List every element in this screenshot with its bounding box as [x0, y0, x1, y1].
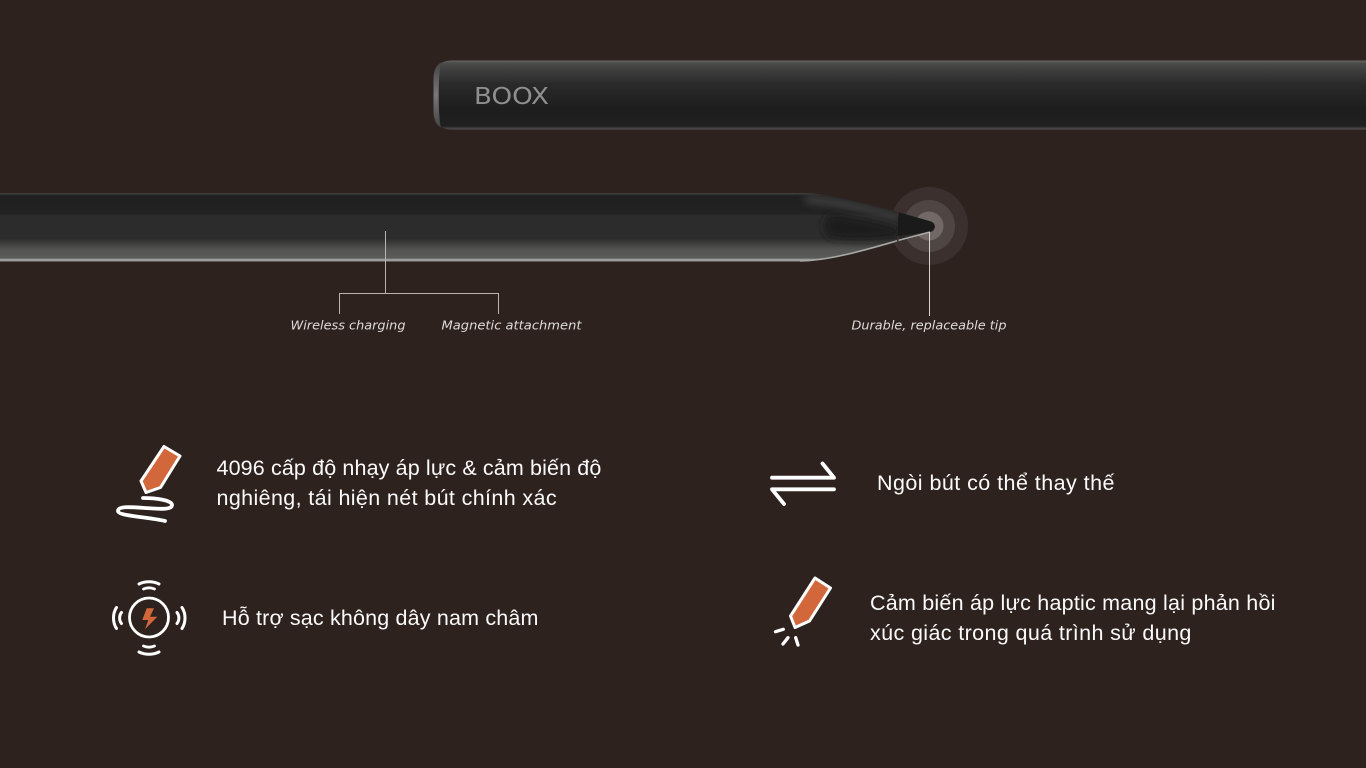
- pen: side view with tip: [0, 193, 935, 262]
- icon: haptic pen: [776, 578, 830, 645]
- text: haptic feedback: [870, 591, 1276, 645]
- text: pressure sensitivity: 4096 cấp độ nhạy áp lực & cảm biến độ: [216, 456, 601, 480]
- callout line: tip: [928, 232, 930, 316]
- label: magnetic attachment: Magnetic attachment: [442, 318, 583, 332]
- icon: pen writing: [118, 446, 180, 521]
- text: haptic feedback: xúc giác trong quá trình sử dụng: [870, 621, 1192, 645]
- BOOX logo: BOOX: [474, 84, 549, 110]
- tip highlight rings: [890, 187, 968, 265]
- icon: wireless charging: [114, 582, 185, 654]
- pen: top view with BOOX logo: [434, 60, 1366, 130]
- pen end cap: [434, 62, 441, 128]
- icon: replaceable arrows: [772, 464, 834, 504]
- text: pressure sensitivity: [216, 456, 601, 510]
- label: replaceable tip: Durable, replaceable tip: [852, 318, 1007, 332]
- text: wireless charging support: Hỗ trợ sạc không dây nam châm: [222, 606, 539, 630]
- text: replaceable nib: Ngòi bút có thể thay thế: [877, 471, 1115, 495]
- text: haptic feedback: Cảm biến áp lực haptic mang lại phản hồi: [870, 591, 1276, 615]
- text: pressure sensitivity: nghiêng, tái hiện nét bút chính xác: [216, 486, 557, 510]
- label: wireless charging: Wireless charging: [290, 318, 406, 332]
- callout lines: wireless charging and magnetic attachment: [340, 231, 498, 314]
